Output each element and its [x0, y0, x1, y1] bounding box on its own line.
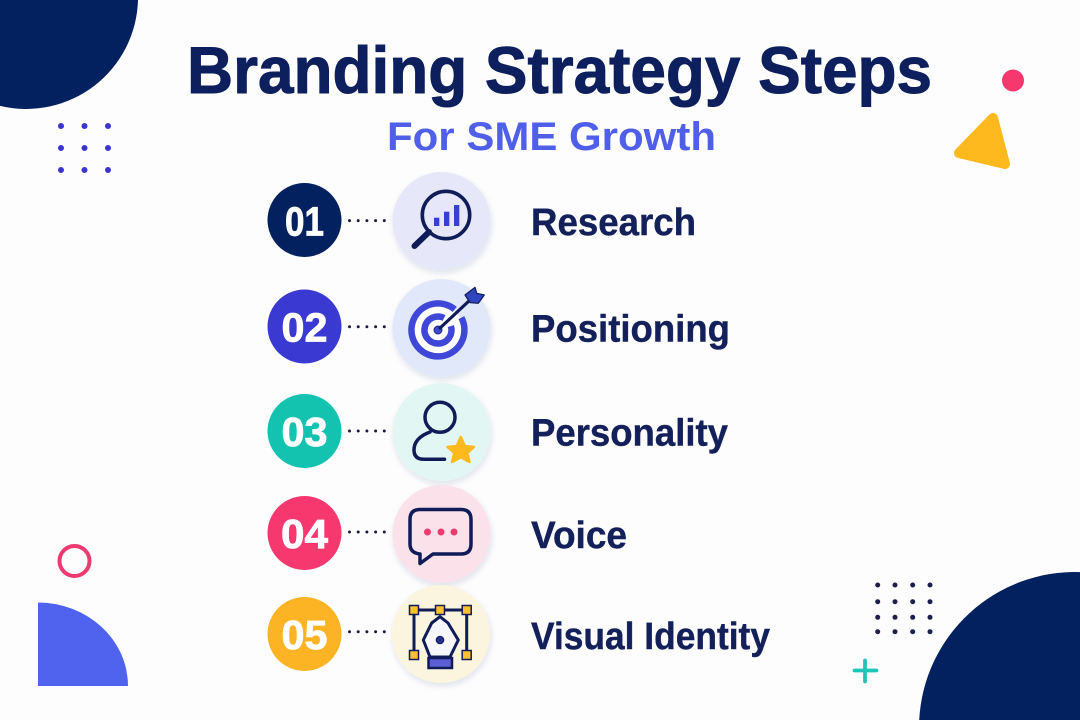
number badge 03: 03	[282, 409, 328, 455]
step 5: visual identity	[268, 585, 770, 683]
decorative pink ring	[60, 546, 90, 576]
decorative dark dot grid	[875, 582, 932, 634]
title: Branding Strategy Steps	[187, 33, 932, 107]
icon: speech bubble	[392, 485, 490, 583]
step 3: personality	[268, 383, 728, 481]
icon: target with arrow	[392, 279, 490, 377]
dotted connector 3	[350, 430, 384, 432]
decorative yellow triangle	[959, 118, 1005, 164]
number badge 04: 04	[281, 511, 328, 557]
decorative navy circle top left	[0, 0, 138, 109]
label: Visual Identity: Visual Identity	[531, 616, 770, 658]
number badge 05: 05	[282, 612, 328, 658]
icon: person with star	[392, 383, 490, 481]
step 2: positioning	[268, 279, 730, 377]
decorative navy circle bottom right	[919, 572, 1080, 720]
dotted connector 2	[350, 325, 384, 328]
decorative blue dot grid	[58, 123, 111, 173]
step 1: research	[268, 172, 696, 270]
decorative pink dot	[1002, 70, 1024, 92]
dotted connector 1	[350, 219, 384, 222]
icon: pen tool	[392, 585, 490, 683]
dotted connector 4	[350, 530, 384, 534]
number badge 01	[268, 183, 342, 257]
number badge 04	[268, 496, 342, 570]
label: Voice: Voice	[531, 515, 627, 557]
label: Research: Research	[531, 202, 696, 244]
number badge 05	[268, 597, 342, 671]
number badge 02	[268, 290, 342, 364]
label: Positioning: Positioning	[531, 308, 730, 350]
icon: magnifier with bars	[392, 172, 490, 270]
subtitle: For SME Growth	[387, 115, 716, 159]
number badge 03	[268, 394, 342, 468]
decorative blue quarter circle	[38, 602, 128, 686]
step 4: voice	[268, 485, 627, 583]
dotted connector 5	[350, 630, 384, 633]
number badge 01: 01	[285, 198, 324, 244]
number badge 02: 02	[282, 304, 328, 350]
decorative teal plus	[854, 660, 876, 682]
label: Personality: Personality	[531, 412, 728, 454]
